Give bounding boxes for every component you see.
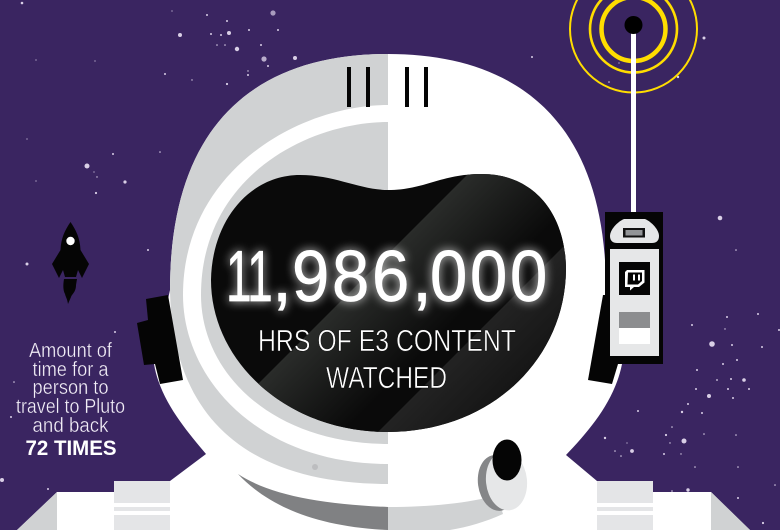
side note: time for a [32,359,109,381]
visor [211,174,566,432]
side note: Amount of [29,340,112,362]
caption: WATCHED [326,361,447,395]
device body [610,249,659,356]
helmet knob [474,440,530,513]
icon: rocket [52,222,89,304]
device cap [610,219,659,243]
side note: and back [32,415,109,437]
caption [258,324,516,395]
icon: twitch logo [619,262,650,295]
headline number [226,235,547,317]
device gauge [619,312,650,328]
collar highlight [388,495,503,530]
helmet ring [183,105,388,464]
left ear clamp [137,295,183,384]
right ear clamp [588,295,625,384]
headline number: , [412,237,432,317]
side note: travel to Pluto [16,396,125,418]
headline number: 11 [226,235,273,316]
side note figure: 72 TIMES [26,436,116,460]
right shoulder patch [597,481,653,530]
caption: HRS OF E3 CONTENT [258,324,516,358]
left shoulder shade [17,492,57,530]
scuff [312,464,318,470]
collar shadow [238,474,388,530]
left shoulder patch [114,481,170,530]
radio device [605,212,663,364]
right shoulder shade [711,492,750,530]
antenna [624,16,642,214]
headline number: 986 [292,236,409,317]
helmet shaded half [170,54,388,484]
visor surround shaded [201,122,388,444]
headline number: 000 [430,236,547,317]
antenna signal rings [570,0,697,92]
side note [16,340,125,437]
headline number: , [272,237,292,317]
helmet vents [347,67,428,107]
side note: person to [32,377,108,399]
